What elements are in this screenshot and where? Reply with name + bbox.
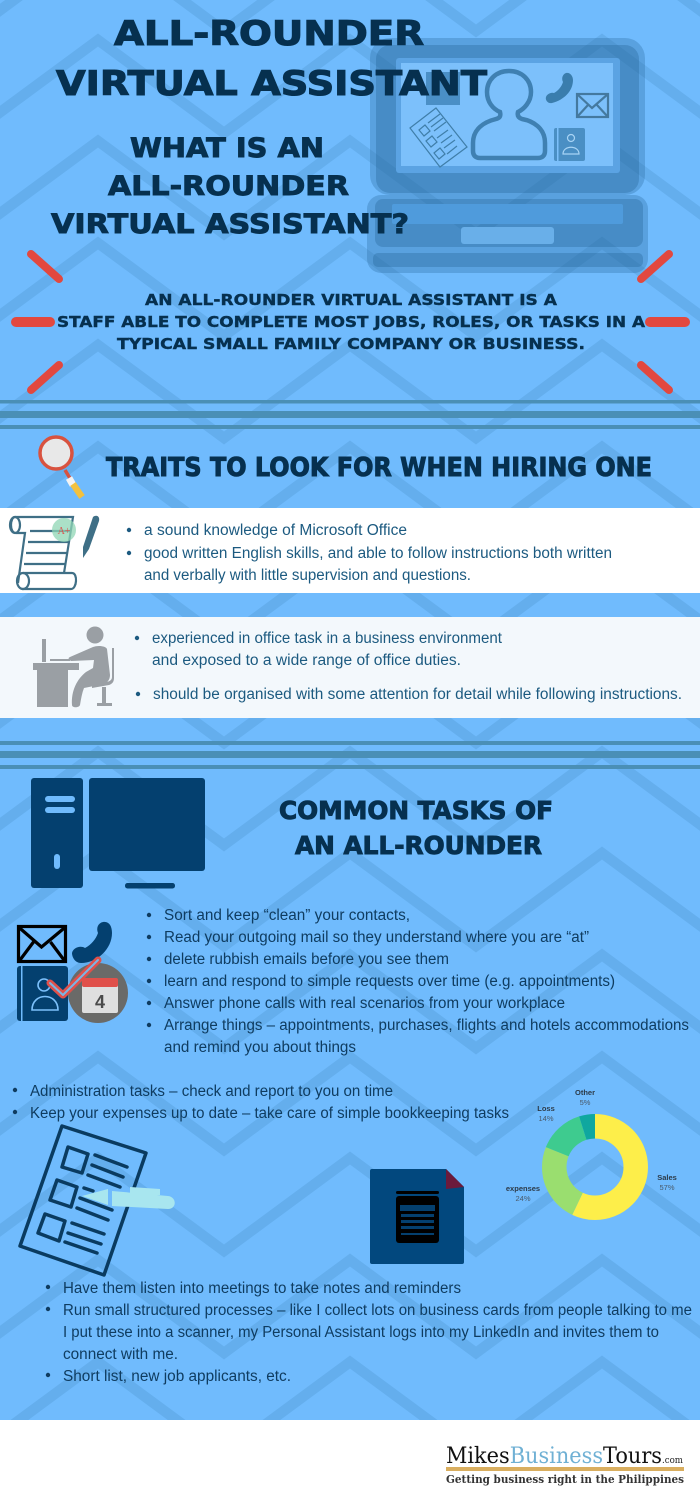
- meetings list: [46, 1280, 692, 1385]
- icon: laptop: [367, 38, 648, 273]
- title: ALL-ROUNDER: [114, 14, 424, 54]
- task list: Arrange things – appointments, purchases, flights and hotels accommodations: [164, 1017, 689, 1034]
- icon: phone: [72, 922, 112, 963]
- meetings list: Short list, new job applicants, etc.: [63, 1368, 291, 1385]
- meetings list: Have them listen into meetings to take notes and reminders: [63, 1280, 461, 1297]
- icon: magnifying glass: [40, 437, 82, 497]
- icon: desktop computer: [31, 778, 205, 888]
- bullets: should be organised with some attention for detail while following instructions.: [153, 686, 682, 703]
- bullets: experienced in office task in a business environment: [152, 630, 503, 647]
- icon: checklist: [410, 108, 467, 167]
- icon: envelope: [577, 94, 608, 117]
- bullets: good written English skills, and able to follow instructions both written: [144, 545, 612, 562]
- admin list: Keep your expenses up to date – take care of simple bookkeeping tasks: [30, 1105, 509, 1122]
- chart labels: 24%: [515, 1194, 531, 1203]
- icon: scroll and pen: A+: [58, 526, 71, 537]
- logo suffix: .com: [662, 1456, 683, 1466]
- icon: scroll and pen: [10, 516, 99, 589]
- chart labels: expenses: [506, 1184, 540, 1193]
- icon: contact book: [17, 966, 68, 1021]
- icon: calculator document: [370, 1169, 464, 1264]
- chart labels: [506, 1088, 677, 1203]
- task list: Read your outgoing mail so they understand where you are “at”: [164, 929, 589, 946]
- meetings list: I put these into a scanner, my Personal Assistant logs into my LinkedIn and invites them to: [63, 1324, 659, 1341]
- title: [56, 14, 488, 104]
- definition text: STAFF ABLE TO COMPLETE MOST JOBS, ROLES, OR TASKS IN A: [57, 313, 645, 331]
- heading: common tasks: COMMON TASKS OF: [279, 796, 553, 825]
- bullets: a sound knowledge of Microsoft Office: [144, 522, 407, 539]
- definition text: [57, 291, 645, 353]
- bullets: [127, 522, 612, 584]
- heading: what is an all-rounder: [51, 133, 409, 240]
- logo: MikesBusinessTours: [446, 1444, 662, 1469]
- panel: traits one: [0, 508, 700, 593]
- task list: Answer phone calls with real scenarios from your workplace: [164, 995, 565, 1012]
- definition text: AN ALL-ROUNDER VIRTUAL ASSISTANT IS A: [145, 291, 557, 309]
- chart labels: 14%: [538, 1114, 554, 1123]
- task list: learn and respond to simple requests over time (e.g. appointments): [164, 973, 615, 990]
- icon: check mark: [50, 960, 98, 995]
- icon: envelope: [18, 926, 66, 962]
- meetings list: connect with me.: [63, 1346, 178, 1363]
- icon: office tools: [17, 922, 128, 1023]
- chart labels: 5%: [580, 1098, 591, 1107]
- task list: and remind you about things: [164, 1039, 356, 1056]
- heading: what is an all-rounder: VIRTUAL ASSISTANT?: [51, 209, 409, 240]
- heading: what is an all-rounder: ALL-ROUNDER: [108, 171, 349, 202]
- panel: traits two: [0, 617, 700, 718]
- heading: what is an all-rounder: WHAT IS AN: [130, 133, 324, 164]
- red accent marks: [16, 254, 685, 390]
- bullets: and exposed to a wide range of office duties.: [152, 652, 461, 669]
- icon: person at desk: [33, 626, 114, 707]
- icon: pen: [82, 1187, 175, 1209]
- heading: common tasks: [279, 796, 553, 860]
- footer: [0, 1420, 700, 1500]
- bullets: and verbally with little supervision and questions.: [144, 567, 471, 584]
- task list: [147, 907, 689, 1056]
- chart labels: 57%: [659, 1183, 675, 1192]
- icon: checklist with pen: [20, 1126, 175, 1275]
- icon: contact book: [554, 128, 585, 161]
- donut chart: [506, 1088, 677, 1208]
- chart labels: Other: [575, 1088, 595, 1097]
- chart labels: Loss: [537, 1104, 555, 1113]
- chart labels: Sales: [657, 1173, 677, 1182]
- title: VIRTUAL ASSISTANT: [56, 64, 488, 104]
- heading: common tasks: AN ALL-ROUNDER: [295, 831, 542, 860]
- admin list: Administration tasks – check and report to you on time: [30, 1083, 393, 1100]
- icon: person outline: [473, 71, 545, 158]
- admin list: [13, 1083, 509, 1122]
- definition text: TYPICAL SMALL FAMILY COMPANY OR BUSINESS.: [117, 335, 585, 353]
- meetings list: Run small structured processes – like I collect lots on business cards from people talking to me: [63, 1302, 692, 1319]
- icon: calendar: 4: [95, 992, 105, 1012]
- task list: Sort and keep “clean” your contacts,: [164, 907, 410, 924]
- icon: phone: [546, 73, 573, 103]
- heading: traits: TRAITS TO LOOK FOR WHEN HIRING ONE: [106, 453, 652, 483]
- task list: delete rubbish emails before you see them: [164, 951, 449, 968]
- bullets: [135, 630, 682, 703]
